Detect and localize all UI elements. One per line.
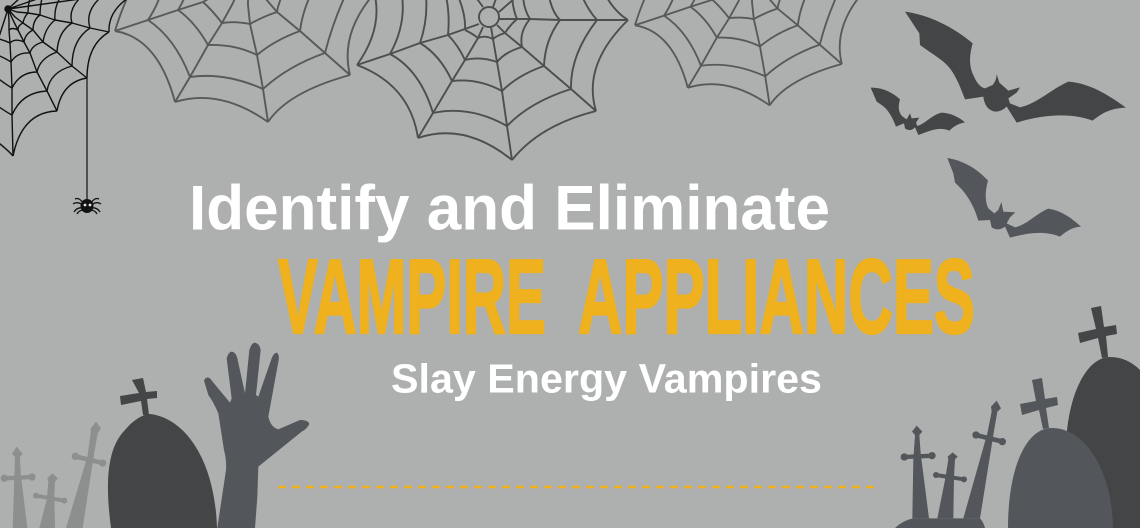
black corner spider web — [0, 0, 128, 156]
tombstone with cross: front right — [1008, 378, 1113, 528]
gray spider web: centre — [357, 0, 628, 160]
bat: gray lower — [947, 158, 1081, 238]
tombstone with cross: back right — [1067, 306, 1140, 528]
gray spider web: right — [635, 0, 861, 105]
dashed divider line — [279, 486, 880, 488]
zombie hand — [204, 343, 309, 528]
bat: large dark — [905, 12, 1126, 123]
subheading: Slay Energy Vampires: Slay Energy Vampires — [391, 356, 822, 402]
tombstone with cross: left — [108, 378, 217, 528]
bat: small dark — [871, 88, 965, 135]
swords: light gray left — [1, 422, 106, 528]
gray spider web: left — [115, 0, 372, 122]
title: Vampire Appliances: VAMPIRE — [278, 238, 546, 356]
spider hanging on thread — [73, 78, 101, 214]
swords on mound: right — [895, 401, 1006, 528]
heading: Identify and Eliminate: Identify and Eliminate — [189, 174, 830, 244]
